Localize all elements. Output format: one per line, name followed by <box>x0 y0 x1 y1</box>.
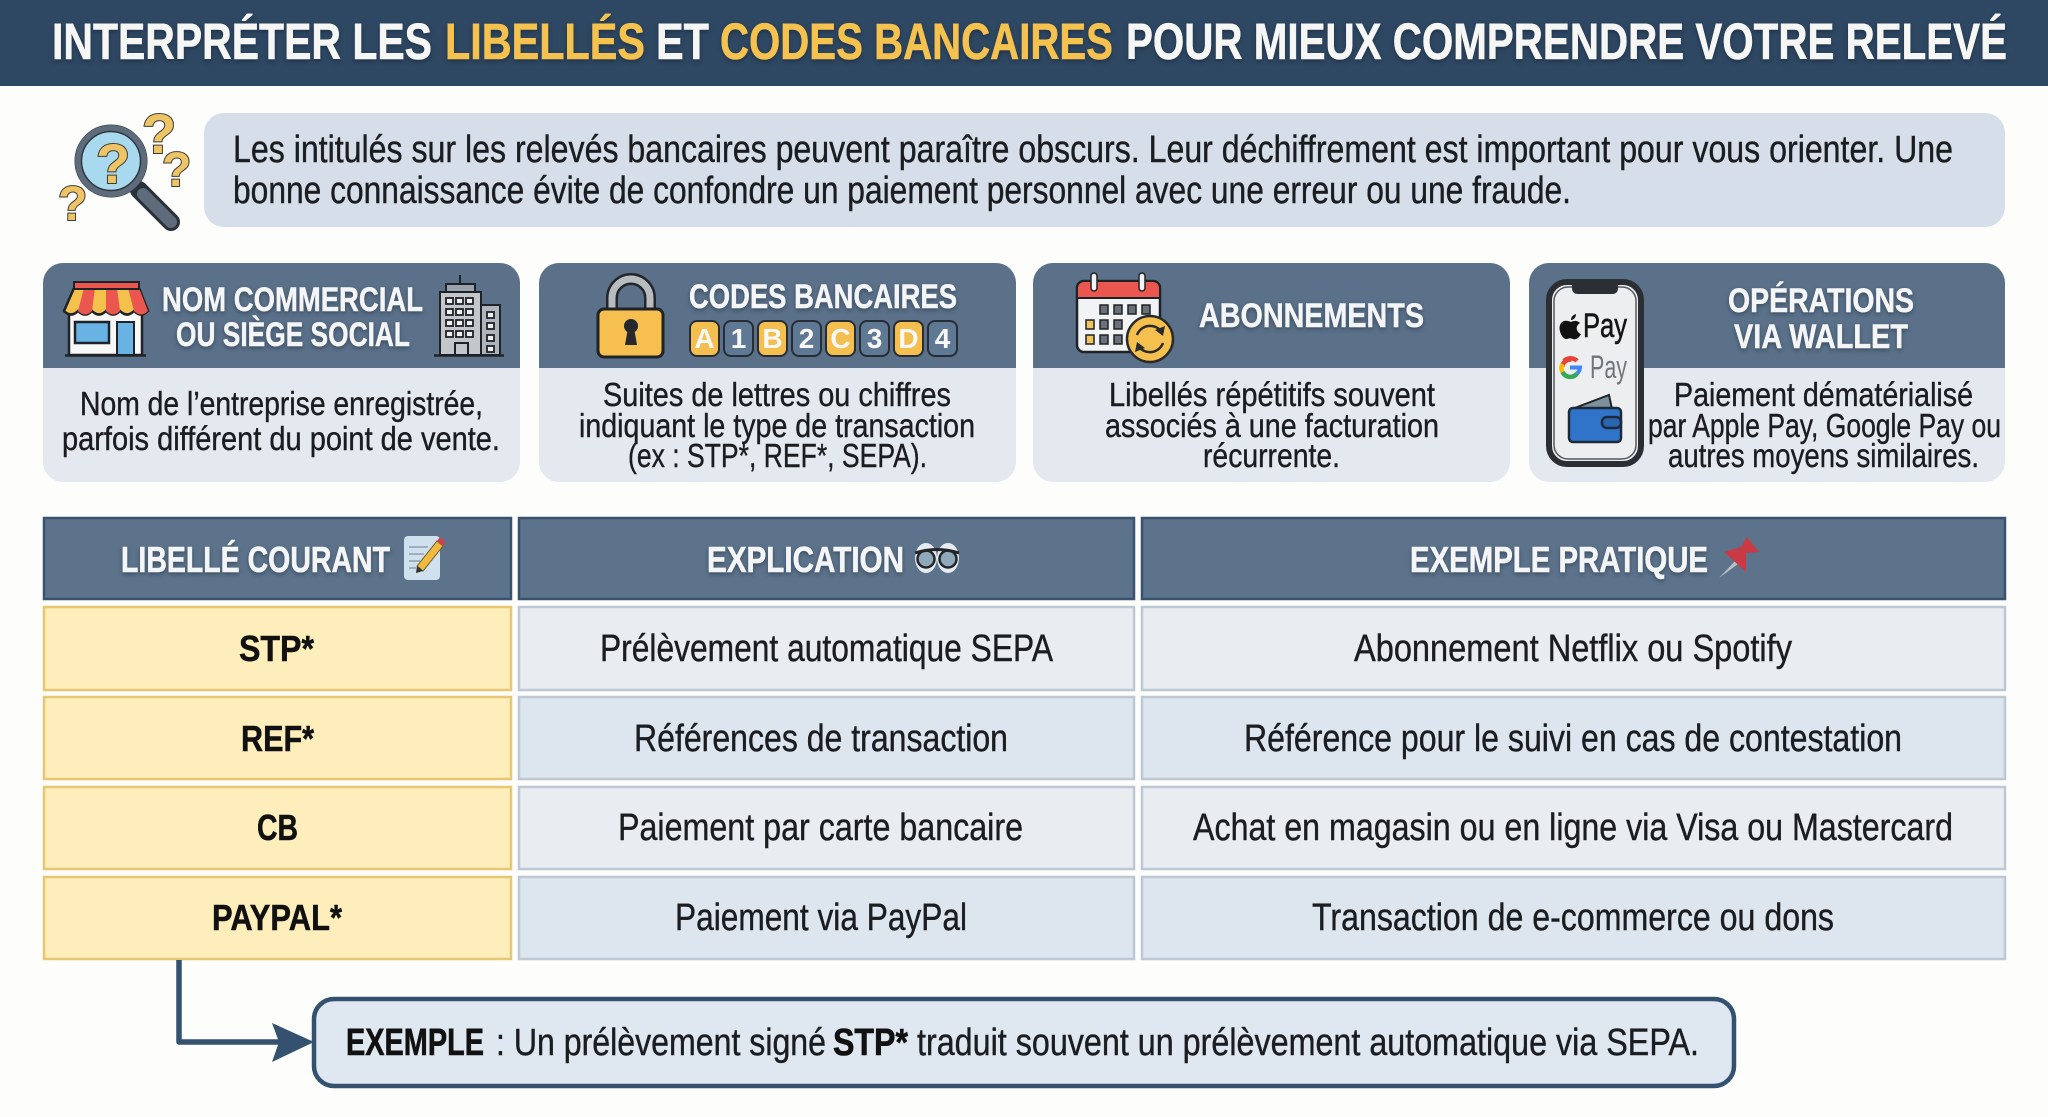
icon: phone with wallet: Pay <box>1590 349 1627 385</box>
description: wallet <box>1648 376 2001 474</box>
icon: office building <box>434 275 504 356</box>
callout: example: EXEMPLE <box>346 1022 484 1064</box>
table: libellés <box>44 518 2005 959</box>
row: STP*: STP* <box>239 628 314 669</box>
description: nom commercial <box>62 385 500 457</box>
description: nom commercial: Nom de l’entreprise enregistrée, <box>80 385 483 422</box>
heading: wallet <box>1728 282 1914 356</box>
description: abonnements <box>1105 376 1439 474</box>
table header: exemple pratique <box>1142 518 2005 599</box>
panel: wallet <box>1529 263 2005 482</box>
heading: abonnements: ABONNEMENTS <box>1199 297 1424 335</box>
code badges: B <box>762 323 783 354</box>
heading: wallet: VIA WALLET <box>1734 318 1908 356</box>
table header: exemple pratique: EXEMPLE PRATIQUE <box>1410 539 1708 580</box>
arrow: table to example <box>179 960 314 1062</box>
heading: wallet: OPÉRATIONS <box>1728 282 1914 320</box>
title: LIBELLÉS <box>445 13 645 70</box>
code badges: C <box>830 323 851 354</box>
table header: explication <box>519 518 1134 599</box>
code badges: D <box>898 323 919 354</box>
description: codes bancaires: (ex : STP*, REF*, SEPA). <box>628 437 927 474</box>
icon: magnifying glass with question marks: ? <box>58 178 87 231</box>
panel: introduction <box>204 113 2005 227</box>
icon: magnifying glass with question marks <box>58 102 191 231</box>
icon: phone with wallet <box>1549 282 1641 464</box>
row: PAYPAL*: PAYPAL* <box>212 897 342 938</box>
code badges <box>690 321 957 356</box>
panel: nom commercial <box>43 263 520 482</box>
callout: example: : Un prélèvement signé <box>496 1022 826 1064</box>
row: STP*: Abonnement Netflix ou Spotify <box>1354 628 1792 670</box>
row: CB: Paiement par carte bancaire <box>618 807 1023 849</box>
heading: codes bancaires: CODES BANCAIRES <box>689 278 957 316</box>
icon: calendar with sync <box>1077 273 1173 362</box>
row: PAYPAL*: Transaction de e-commerce ou dons <box>1312 897 1834 939</box>
icon: magnifying glass with question marks: ? <box>96 132 130 195</box>
description: wallet: autres moyens similaires. <box>1668 437 1979 474</box>
description: codes bancaires: indiquant le type de transaction <box>579 407 975 444</box>
row: CB: CB <box>257 807 298 848</box>
title <box>52 13 2007 70</box>
description: wallet: Paiement dématérialisé <box>1674 376 1973 413</box>
row: REF* <box>44 697 2005 779</box>
code badges: 3 <box>867 323 882 354</box>
icon: padlock <box>598 279 663 357</box>
icon: shop <box>64 282 148 356</box>
title: ET <box>656 13 709 70</box>
panel: codes bancaires <box>539 263 1016 482</box>
code badges: 1 <box>731 323 746 354</box>
row: CB <box>44 787 2005 869</box>
code badges: 2 <box>799 323 814 354</box>
description: codes bancaires <box>579 376 975 474</box>
panel: abonnements <box>1033 263 1510 482</box>
icon: phone with wallet: Pay <box>1583 307 1627 345</box>
table header: libellé courant: LIBELLÉ COURANT <box>121 539 390 580</box>
row: STP*: Prélèvement automatique SEPA <box>600 628 1054 670</box>
code badges: 4 <box>935 323 951 354</box>
code badges: A <box>694 323 715 354</box>
heading: nom commercial: NOM COMMERCIAL <box>162 281 423 319</box>
intro text: bonne connaissance évite de confondre un paiement personnel avec une erreur ou une fraude. <box>233 170 1571 212</box>
callout: example <box>314 999 1734 1086</box>
description: abonnements: associés à une facturation <box>1105 407 1439 444</box>
description: abonnements: Libellés répétitifs souvent <box>1109 376 1435 413</box>
title: INTERPRÉTER LES <box>52 13 432 70</box>
heading: nom commercial <box>162 281 423 354</box>
title banner <box>0 0 2048 86</box>
title: CODES BANCAIRES <box>720 13 1113 70</box>
callout: example: STP* <box>833 1022 908 1064</box>
description: nom commercial: parfois différent du point de vente. <box>62 420 500 457</box>
table header: explication: EXPLICATION <box>707 539 904 580</box>
table header: libellé courant <box>44 518 511 599</box>
heading: nom commercial: OU SIÈGE SOCIAL <box>176 316 410 354</box>
intro text <box>233 129 1953 212</box>
row: REF*: Références de transaction <box>634 718 1008 760</box>
row: STP* <box>44 607 2005 690</box>
icon: magnifying glass with question marks: ? <box>162 144 191 197</box>
row: REF*: REF* <box>241 718 314 759</box>
row: PAYPAL* <box>44 877 2005 959</box>
description: codes bancaires: Suites de lettres ou chiffres <box>603 376 951 413</box>
description: abonnements: récurrente. <box>1203 437 1340 474</box>
callout: example: traduit souvent un prélèvement automatique via SEPA. <box>917 1022 1699 1064</box>
row: PAYPAL*: Paiement via PayPal <box>675 897 967 939</box>
icon: magnifying glass with question marks: ? <box>142 102 176 165</box>
row: REF*: Référence pour le suivi en cas de contestation <box>1244 718 1902 760</box>
